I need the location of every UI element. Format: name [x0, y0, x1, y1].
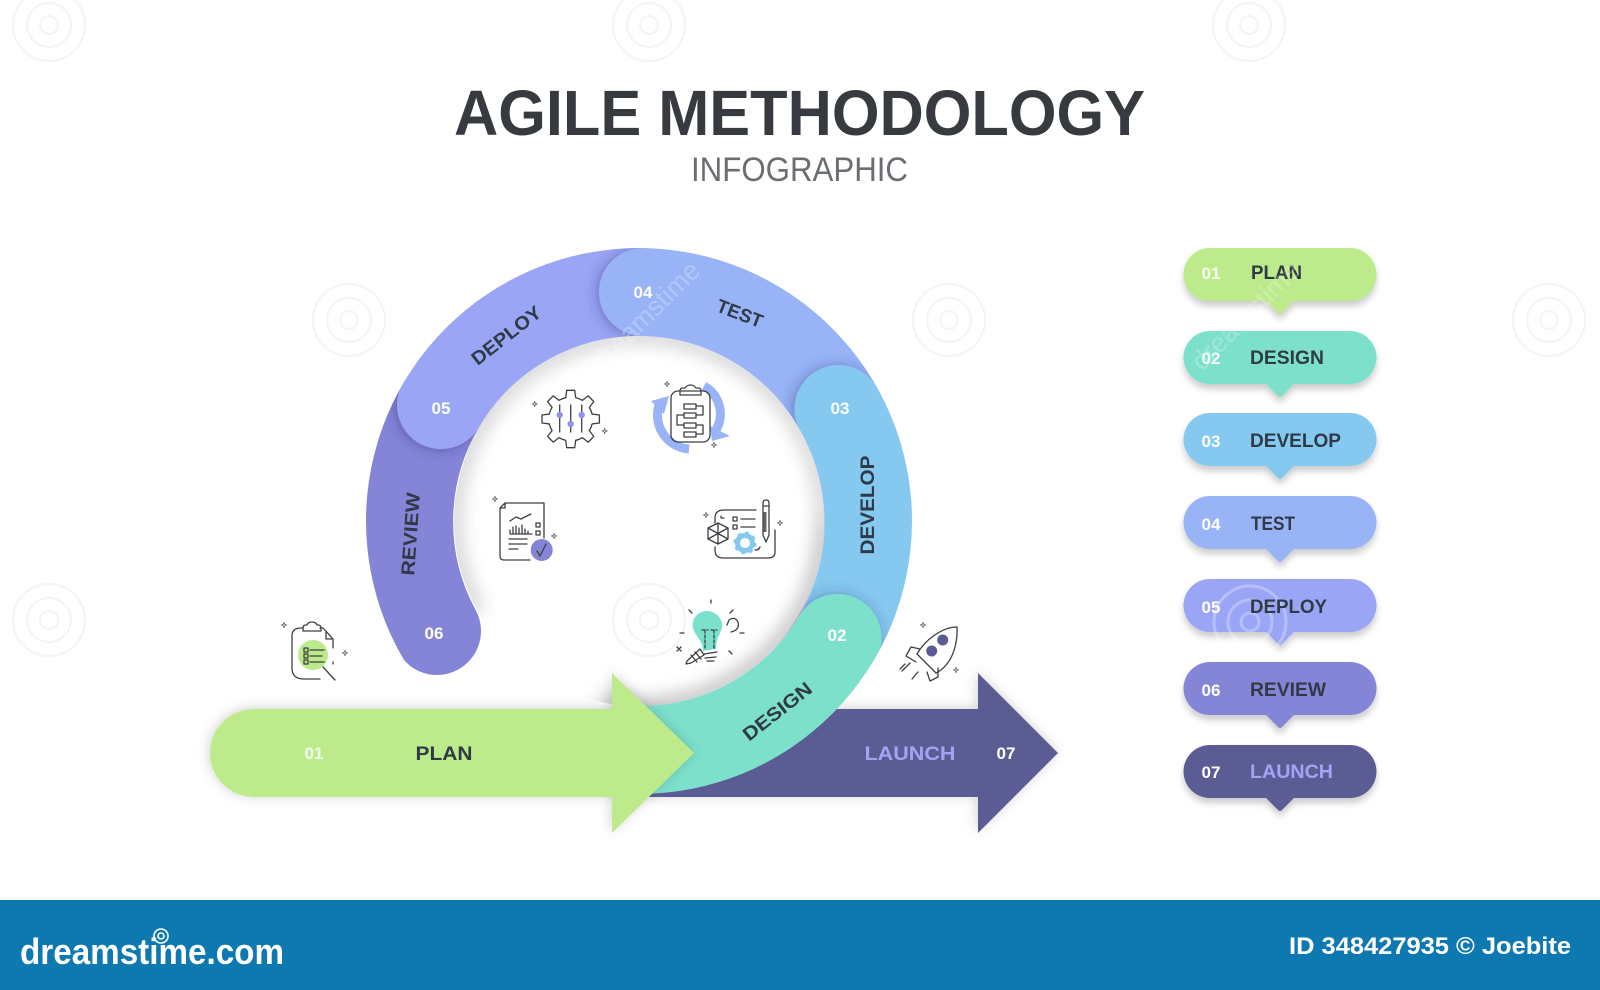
- label: test number: 04: [634, 283, 653, 302]
- watermark text: [585, 255, 1306, 376]
- label: plan number: 01: [305, 744, 323, 763]
- legend item: 01 plan: 01: [1202, 264, 1220, 283]
- legend item: 01 plan: [1184, 248, 1376, 314]
- label: design: DESIGN: [739, 679, 817, 746]
- icon: test clipboard cycle: [651, 381, 730, 449]
- label: design number: 02: [828, 626, 846, 645]
- legend item: 04 test: 04: [1202, 515, 1221, 534]
- legend item: 05 deploy: [1184, 579, 1376, 658]
- icon: plan clipboard: [281, 622, 348, 680]
- label: launch: LAUNCH: [864, 744, 956, 765]
- footer banner: [0, 900, 1600, 990]
- arrow: plan: [210, 673, 694, 833]
- label: launch number: 07: [997, 744, 1015, 763]
- legend item: 06 review: [1184, 662, 1376, 728]
- legend item: 05 deploy: DEPLOY: [1250, 597, 1327, 618]
- label: develop number: 03: [831, 399, 849, 418]
- label: review number: 06: [425, 624, 443, 643]
- inner circle shadow: [454, 336, 824, 706]
- legend item: 03 develop: [1184, 413, 1376, 479]
- legend item: 07 launch: [1184, 745, 1376, 811]
- segment: develop: [838, 409, 869, 638]
- label: plan: PLAN: [416, 744, 472, 765]
- legend item: 04 test: TEST: [1251, 514, 1295, 535]
- legend item: 02 design: 02: [1202, 349, 1220, 368]
- segment: design: [640, 638, 838, 750]
- banner credit: ID 348427935 © Joebite: [1289, 933, 1571, 960]
- legend item: 05 deploy: 05: [1202, 598, 1220, 617]
- watermark text: dreamstime: [1185, 255, 1306, 376]
- ring segments: [409, 292, 869, 750]
- legend item: 03 develop: 03: [1202, 432, 1220, 451]
- legend item: 01 plan: PLAN: [1251, 263, 1302, 284]
- legend item: 06 review: REVIEW: [1250, 680, 1326, 701]
- arrow: launch: [640, 673, 1058, 833]
- ring and arrow labels: [305, 283, 1015, 765]
- banner logo: dreamstime.com: [20, 931, 284, 972]
- legend item: 06 review: 06: [1202, 681, 1220, 700]
- legend item: 03 develop: DEVELOP: [1250, 431, 1341, 452]
- legend item: 07 launch: 07: [1202, 763, 1220, 782]
- icon: launch rocket: [900, 622, 959, 681]
- watermark spirals: [13, 0, 1585, 656]
- label: deploy: DEPLOY: [468, 302, 546, 370]
- legend: [1184, 248, 1376, 811]
- segment: deploy: [441, 292, 643, 405]
- label: deploy number: 05: [432, 399, 450, 418]
- segment: review: [409, 405, 441, 631]
- label: develop: DEVELOP: [858, 455, 879, 555]
- legend item: 07 launch: LAUNCH: [1250, 762, 1333, 783]
- icon: develop blueprint: [703, 500, 783, 558]
- legend item: 04 test: [1184, 496, 1376, 562]
- title: AGILE METHODOLOGY: [454, 77, 1145, 149]
- label: test: TEST: [713, 296, 766, 333]
- legend item: 02 design: [1184, 331, 1376, 397]
- banner logo swirl: [154, 929, 168, 943]
- icon: deploy gear: [532, 390, 608, 448]
- watermark text: dreamstime: [585, 255, 706, 376]
- legend item: 02 design: DESIGN: [1250, 348, 1324, 369]
- icon: review report: [492, 496, 557, 561]
- label: review: REVIEW: [398, 492, 425, 576]
- subtitle: INFOGRAPHIC: [691, 151, 908, 189]
- icon: design light bulb: [677, 600, 744, 664]
- segment: test: [643, 292, 838, 409]
